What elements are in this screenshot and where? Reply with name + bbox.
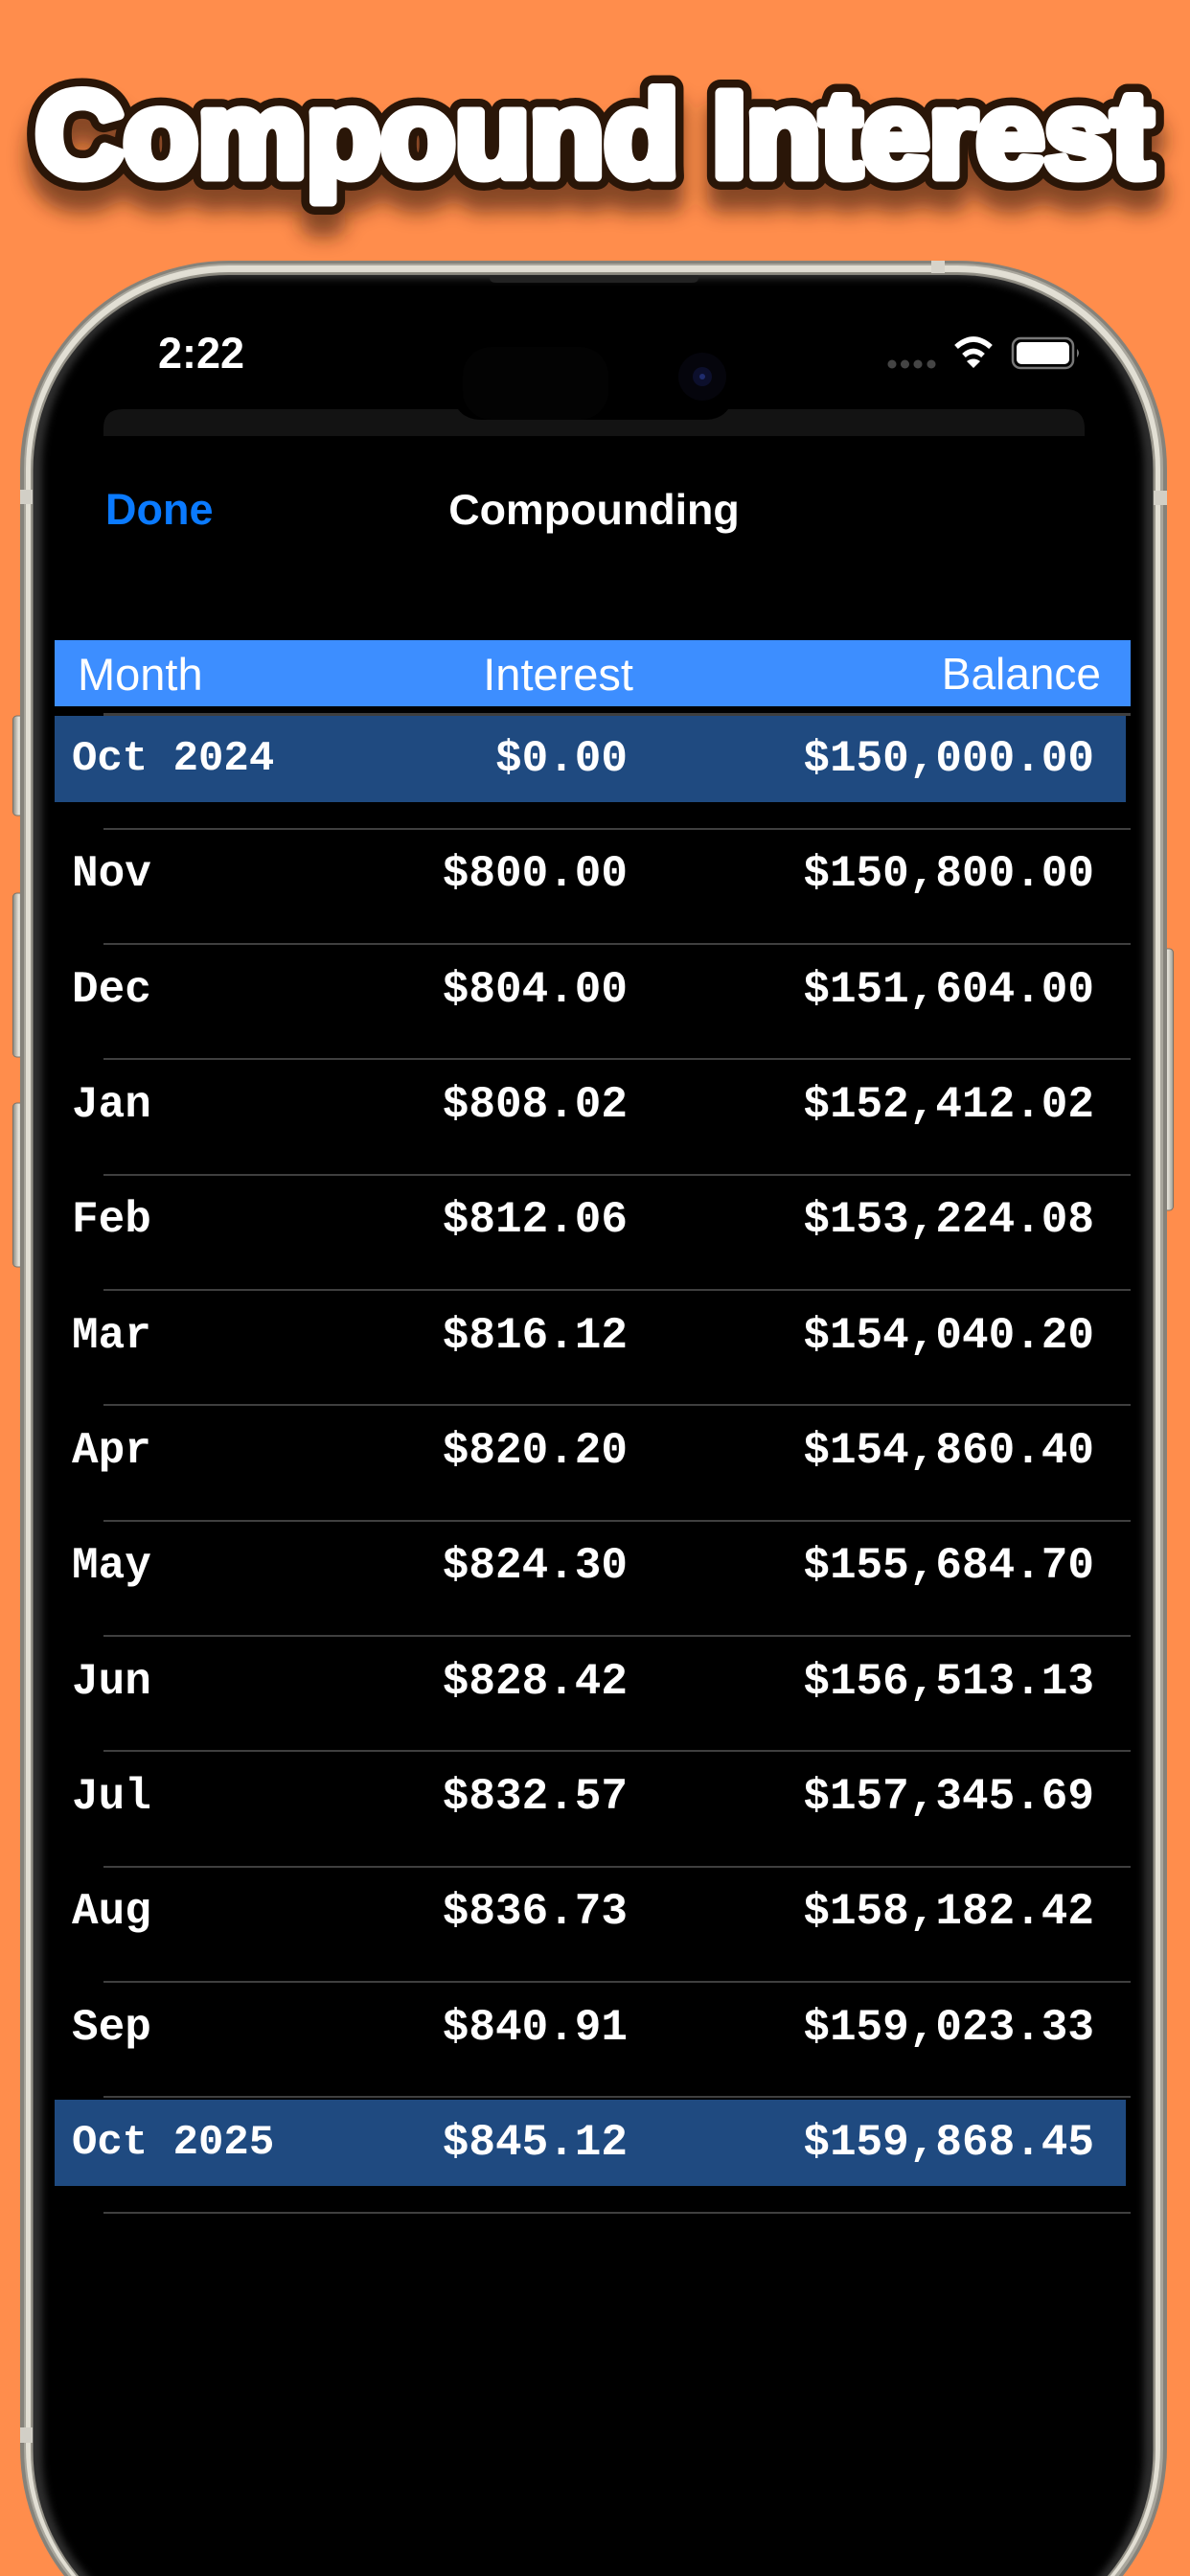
row: Jul: $832.57 <box>443 1772 628 1822</box>
title: Compound Interest: Compound Interest <box>35 67 1153 202</box>
row: Sep <box>72 2003 1094 2053</box>
row: Dec <box>72 965 1094 1015</box>
row: Apr: $820.20 <box>443 1426 628 1476</box>
row: Nov <box>72 849 1094 899</box>
row: Dec: Dec <box>72 965 151 1015</box>
title: Compound Interest: Compound Interest <box>35 89 1153 224</box>
row: Dec: $151,604.00 <box>803 965 1094 1015</box>
row: Nov: $800.00 <box>443 849 628 899</box>
row: Oct 2025: $845.12 <box>443 2118 628 2168</box>
header: Balance: Balance <box>942 649 1101 699</box>
row: Nov: $150,800.00 <box>803 849 1094 899</box>
row: Oct 2024: $0.00 <box>495 734 628 784</box>
row: Feb: Feb <box>72 1195 151 1245</box>
row: Oct 2024 <box>55 716 1126 802</box>
row: Jul <box>72 1772 1094 1822</box>
dynamic island <box>458 347 728 420</box>
row: Jan: $152,412.02 <box>803 1080 1094 1130</box>
row: Dec: $804.00 <box>443 965 628 1015</box>
row: Jun <box>72 1657 1094 1707</box>
row: Mar: $154,040.20 <box>803 1311 1094 1361</box>
row: Oct 2024: Oct 2024 <box>72 735 274 783</box>
row: Oct 2024: $150,000.00 <box>803 734 1094 784</box>
row: Sep: $840.91 <box>443 2003 628 2053</box>
status bar time: 2:22 <box>158 329 244 378</box>
title: Compound Interest: Compound Interest <box>35 67 1153 202</box>
row: Mar: $816.12 <box>443 1311 628 1361</box>
table header <box>55 640 1131 706</box>
row: May: May <box>72 1541 151 1591</box>
speaker notch <box>490 275 698 283</box>
nav: Done button: Done <box>105 485 213 534</box>
row: Apr: Apr <box>72 1426 151 1476</box>
row: Aug: $158,182.42 <box>803 1887 1094 1937</box>
row: Aug: Aug <box>72 1887 151 1937</box>
row: Sep: Sep <box>72 2003 151 2053</box>
row: Jun: $156,513.13 <box>803 1657 1094 1707</box>
row: May <box>72 1541 1094 1591</box>
row: Oct 2025 <box>55 2100 1126 2186</box>
row: Jan <box>72 1080 1094 1130</box>
row: Jul: Jul <box>72 1772 151 1822</box>
row: Apr <box>72 1426 1094 1476</box>
signal dots <box>887 360 935 368</box>
row: Jan: $808.02 <box>443 1080 628 1130</box>
row: Mar <box>72 1311 1094 1361</box>
row: Feb: $153,224.08 <box>803 1195 1094 1245</box>
nav: Compounding title: Compounding <box>448 486 740 534</box>
header: Interest: Interest <box>483 649 633 700</box>
row: Jun: $828.42 <box>443 1657 628 1707</box>
wifi icon <box>956 339 991 368</box>
side buttons <box>13 716 1173 1267</box>
row: Aug <box>72 1887 1094 1937</box>
row: Aug: $836.73 <box>443 1887 628 1937</box>
row: Jul: $157,345.69 <box>803 1772 1094 1822</box>
header: Month: Month <box>78 649 203 700</box>
row: Nov: Nov <box>72 849 151 899</box>
battery icon <box>1013 338 1079 368</box>
row: Apr: $154,860.40 <box>803 1426 1094 1476</box>
row: Oct 2025: Oct 2025 <box>72 2119 274 2167</box>
top sheet edge <box>103 409 1085 436</box>
row: Feb <box>72 1195 1094 1245</box>
row: Jun: Jun <box>72 1657 151 1707</box>
row: Feb: $812.06 <box>443 1195 628 1245</box>
row: Oct 2025: $159,868.45 <box>803 2118 1094 2168</box>
row: Sep: $159,023.33 <box>803 2003 1094 2053</box>
row: May: $155,684.70 <box>803 1541 1094 1591</box>
status icons <box>887 336 1079 370</box>
row: Mar: Mar <box>72 1311 151 1361</box>
row: May: $824.30 <box>443 1541 628 1591</box>
row: Jan: Jan <box>72 1080 151 1130</box>
